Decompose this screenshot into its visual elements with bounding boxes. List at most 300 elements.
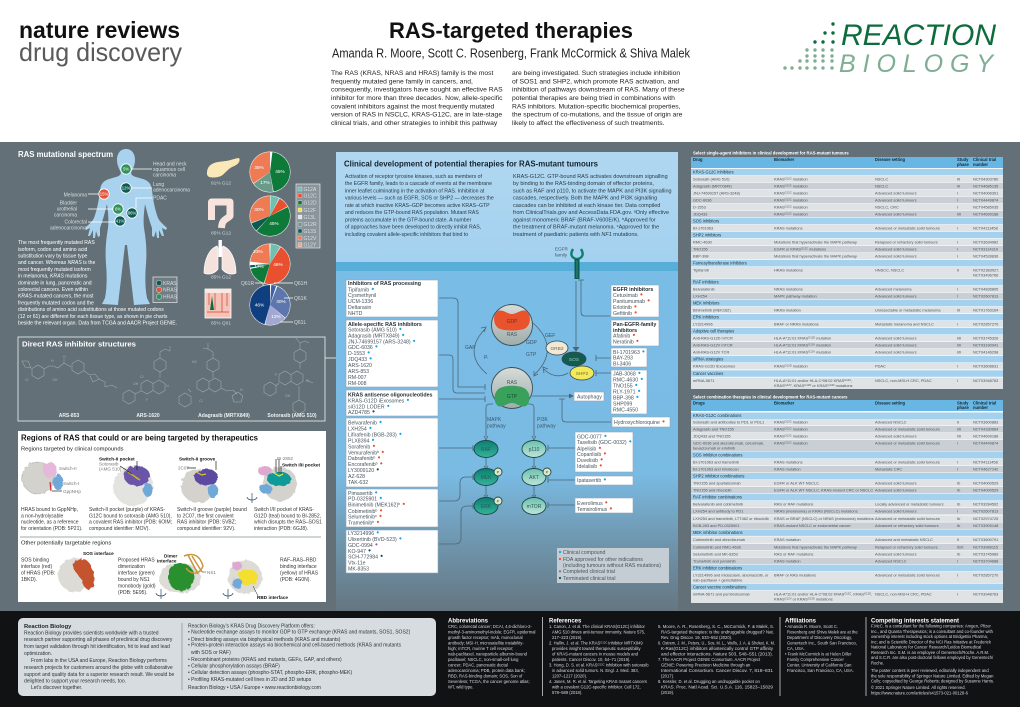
- heading: direct RAS inhibitor structures: Direct RAS inhibitor structures: [22, 340, 136, 348]
- box: hydroxychloroquine: Hydroxychloroquine •: [614, 417, 665, 426]
- box: AKT inhibitor: [575, 475, 633, 485]
- chemical structure: ARS-1620: [123, 346, 170, 419]
- exchange labels: GTP: [526, 352, 537, 358]
- text: pathway explanation: by binding to the RAS-binding domain of effector proteins,: [513, 181, 654, 187]
- table: select combination therapies: LY3214996 and midazolam, abemaciclib, or: [693, 572, 769, 577]
- footer: references: 217–223 (2019).: [552, 635, 582, 640]
- table: select combination therapies: I: [957, 591, 958, 596]
- pie chart: pancreas: 17%: [260, 180, 271, 186]
- table: select combination therapies: NCT03905148: [973, 523, 998, 528]
- text: pathway explanation: such as RAF and p110, to activate the MAPK and PI3K signalling: [513, 188, 672, 194]
- legend: KRAS mutations: G12F: [304, 208, 316, 214]
- structure: switch-II pocket with sotorasib: [99, 456, 153, 506]
- footer: references: 1207–1217 (2020).: [552, 674, 587, 679]
- table: select combination therapies: BRAF or RAS mutations: [774, 572, 816, 577]
- table header: Drugs: [693, 400, 706, 406]
- footer: competing interests statement: https://www.nature.com/articles/s41573-021-00128-6: [871, 690, 969, 695]
- introduction text: of SOS1 and SHP2, which promote RAS activation, and: [512, 78, 679, 85]
- box: EGFR inhibitors: [611, 285, 659, 317]
- table: select single-agent inhibitors: NCT03190941: [973, 343, 998, 348]
- body figure with tumour frequencies: Bladder: [60, 200, 77, 206]
- text: pathway explanation: the EGFR family, leads to a cascade of events at the membrane: [345, 181, 492, 187]
- table: select combination therapies: Trametinib and ponatinib: [693, 558, 736, 563]
- box: PI3K inhibitors: [575, 432, 633, 472]
- footer: affiliations: Rosenberg and Shiva Malek are at the: [787, 630, 858, 635]
- structure: switch-II pocket with sotorasib: Sotorasib: [99, 462, 119, 466]
- introduction text: version of RAS in NSCLC, KRAS-G12C, are in late-stage: [331, 112, 502, 119]
- structure: HRAS dimerization interface with NS1: bound by NS1: [118, 577, 150, 583]
- text: KRAS drug discovery platform offers: • Cellular phosphorylation assays (BRAF): [188, 664, 280, 670]
- body figure with tumour frequencies: 15%: [100, 192, 108, 197]
- footer: abbreviations: methyl-3-aminomethyl-indole; EGFR, epidermal: [448, 630, 536, 635]
- footer: references: (2017).: [661, 674, 674, 679]
- table: select combination therapies: Advanced solid tumours: [875, 509, 917, 514]
- text: pathway explanation: and reduces the GTP-bound RAS population. Mutant RAS: [345, 210, 479, 216]
- table: select single-agent inhibitors: BBP-398: [693, 254, 709, 259]
- kinase labels: p110: [529, 447, 540, 453]
- box: ERK inhibitors: [346, 528, 438, 573]
- structure: switch-II groove with 2C07: [178, 456, 218, 503]
- table header: number: [973, 405, 988, 410]
- box: RAF inhibitors: LXH254 •: [348, 424, 372, 432]
- box: allele-specific RAS inhibitors: JDQ433 •: [348, 354, 372, 363]
- text: mutational spectrum description: distributions of amino acid substitutions at those mutated codons: [18, 307, 164, 313]
- captions: clinical compound structures: G12D (teal) bound to BI-2852,: [254, 513, 321, 519]
- structure: SOS binding interface: of HRAS (PDB:: [21, 570, 55, 576]
- introduction text: [331, 70, 685, 127]
- subheading: clinical compounds: Regions targeted by clinical compounds: [21, 446, 124, 452]
- structure: switch I/II pocket with BI-2852: BI-2852: [277, 456, 294, 461]
- panel: regions of RAS targeted by therapeutics: [18, 431, 326, 602]
- introduction text: consequently, investigators have sought an effective RAS: [331, 87, 503, 94]
- table: select combination therapies: NCT03989115: [973, 544, 998, 549]
- text: pathway explanation: from ClinicalTrials.gov and AccessData.FDA.gov. ᵃOnly effective: [513, 210, 669, 216]
- box: SHP2 inhibitors: BBP-398 •: [613, 392, 639, 402]
- footer: competing interests statement: © 2021 Springer Nature Limited. All rights reserved.: [871, 685, 966, 690]
- box: PI3K inhibitors: Alpelisib •: [577, 444, 602, 452]
- box: SHP2 inhibitors: TNO155 •: [613, 380, 638, 390]
- body figure with tumour frequencies: Melanoma: [64, 192, 87, 198]
- table: select single-agent inhibitors: NSCLC, non-MSI-H CRC, PDAC: [875, 378, 932, 383]
- structure: switch I/II pocket with BI-2852: Switch I/II pocket: [282, 462, 320, 468]
- text: about Reaction Biology: research partner supporting all phases of preclinical drug discovery: [24, 637, 173, 643]
- legend: KRAS mutations: [296, 184, 320, 248]
- box: MEK inhibitors: Pimasertib •: [348, 488, 378, 497]
- chemical structure: Adagrasib: Cl: [199, 399, 203, 403]
- table: select single-agent inhibitors: NRAS mutation: [774, 307, 801, 312]
- table: select combination therapies: Advanced and metastatic NSCLC: [875, 537, 933, 542]
- table: select combination therapies: Adagrasib and TNO155: [693, 427, 734, 432]
- footer: affiliations: • Frank McCormick is at Helen Diller: [785, 652, 852, 657]
- box: ERK inhibitors: MK-8353: [348, 566, 369, 572]
- kinase labels: ERK: [481, 504, 492, 510]
- table: select single-agent inhibitors: RMC-4630: [693, 240, 713, 245]
- box: ERK inhibitors: Ulixertinib (BVD-523) •: [348, 534, 402, 543]
- text: pathway explanation: rate at which inactive KRAS–GDP becomes active KRAS–GTP: [345, 203, 490, 209]
- pie chart: lung: 17%: [254, 264, 265, 270]
- body figure with tumour frequencies: carcinoma: [153, 172, 176, 178]
- text: pathway explanation: proteins accumulate in the GTP-bound state. A number: [345, 217, 472, 223]
- table: select combination therapies: EGFR or ALK WT NSCLC, KRAS-mutant CRC or NSCLC: [774, 488, 873, 493]
- structure: RAF-RAS-RBD interface: [228, 558, 319, 600]
- text: pathway explanation: various levels — such as EGFR, SOS or SHP2 — decreases the: [345, 196, 494, 202]
- table: select single-agent inhibitors: LY3214996: [693, 322, 713, 327]
- table: select single-agent inhibitors: NCT04835805: [973, 286, 998, 291]
- text: pathway explanation: of approaches have been developed to directly inhibit RAS,: [345, 224, 481, 230]
- table: select single-agent inhibitors: KRASG12C mutation: [774, 197, 808, 202]
- footer: abbreviations: [448, 618, 536, 690]
- footer: references: and effector interactions. Nature 503, 548–551 (2013).: [661, 652, 773, 657]
- sponsor logo: Reaction Biology: BIOLOGY: [839, 50, 995, 78]
- table: select combination therapies: NCT03745989: [973, 551, 998, 556]
- RAS-GTP complex: RAS: [507, 380, 518, 386]
- table: select single-agent inhibitors: RAF inhibitors: [693, 279, 719, 284]
- chemical structure: Sotorasib: OH: [285, 394, 291, 398]
- kinase labels: [481, 447, 549, 510]
- box: MEK inhibitors: Trametinibᵇ •: [348, 518, 380, 526]
- box: allele-specific RAS inhibitors: ARS-1620: [348, 363, 372, 369]
- table: select single-agent inhibitors: I: [957, 322, 958, 327]
- box: mTOR inhibitors: [575, 498, 633, 513]
- table: select single-agent inhibitors: NCT03948763: [973, 378, 998, 383]
- text: about Reaction Biology: optimization.: [24, 651, 52, 657]
- exchange labels: GEF: [545, 333, 555, 339]
- footer: competing interests statement: F.McC. is a consultant for the following companies: Amgen, Pfizer: [871, 624, 992, 628]
- body figure with tumour frequencies: squamous cell: [153, 167, 185, 173]
- box: allele-specific RAS inhibitors: Adagrasib (MRTX849) •: [348, 330, 405, 340]
- table: select combination therapies: bevacizumab or erlotinib: [693, 446, 735, 451]
- legend: compound status: FDA approved for other indications: [563, 557, 643, 563]
- structure: switch-II pocket with sotorasib: (AMG 510): [99, 466, 122, 472]
- table: select single-agent inhibitors: Advanced solid tumours: [875, 211, 917, 216]
- chemical structure: ARS-1620: N: [166, 384, 169, 388]
- structure: HRAS dimerization interface with NS1: dimerization: [118, 564, 145, 570]
- table: select combination therapies: BI-1701963 and trametinib: [693, 460, 739, 465]
- structure: HRAS bound to GppNHp: Switch-I: [63, 481, 79, 486]
- pie chart: skin: Q61K: [294, 296, 307, 302]
- authors: Amanda R. Moore, Scott C. Rosenberg, Frank McCormick & Shiva Malek: [332, 46, 691, 60]
- text: mutational spectrum description: (12 or 61) are different for each tissue type, as shown in pie charts: [18, 314, 168, 320]
- exchange labels: GDP: [526, 340, 538, 346]
- table: select single-agent inhibitors: KRASG12C mutation: [774, 190, 808, 195]
- footer: references: with a covalent G12C-specific inhibitor. Cell 172,: [552, 685, 641, 690]
- table: select combination therapies: Advanced solid tumours: [875, 481, 917, 486]
- body figure with tumour frequencies: 12%: [122, 186, 130, 191]
- box: RAF inhibitors: Lifirafenib (BGB-283) •: [348, 430, 402, 438]
- body figure with tumour frequencies: urothelial: [57, 206, 77, 212]
- icon: EGFR family receptor: EGFR: [555, 246, 568, 252]
- table: select single-agent inhibitors: KRAS-G12C inhibitors: [693, 169, 734, 174]
- table: select combination therapies: RAS or RAF mutations: [774, 551, 813, 556]
- table: select single-agent inhibitors: NSCLC, CRC: [875, 204, 899, 209]
- table: select combination therapies: Cancer vaccine combinations: [693, 584, 746, 589]
- footer: references: KRAS. Proc. Natl Acad. Sci. U.S.A. 116, 15823–15829: [661, 685, 774, 690]
- box: MEK inhibitors: Binimetinib (MEK162)ᵇ •: [348, 500, 405, 508]
- table: select single-agent inhibitors: NCT03496766: [973, 273, 998, 278]
- captions: clinical compound structures: RAS inhibitor (PDB: 5VBZ;: [177, 520, 236, 526]
- captions: clinical compound structures: compound identifier: 92V).: [177, 526, 235, 532]
- captions: clinical compound structures: nucleotide, as a reference: [21, 520, 79, 526]
- table: select single-agent inhibitors: NCT03608631: [973, 364, 998, 369]
- table: select single-agent inhibitors: Advanced solid tumours: [875, 336, 917, 341]
- table header: Study: [957, 400, 969, 406]
- footer: references: 6. Ostrem, J. M., Peters, U., Sos, M. L., Wells, J. A. & Shokat, K. M.: [658, 641, 775, 646]
- table: select combination therapies: NCT03600883: [973, 420, 998, 425]
- table: select combination therapies: NCT04449874: [973, 441, 999, 446]
- table: select single-agent inhibitors: HLA-A*11:01 KRASG12V mutation: [774, 343, 831, 348]
- table: select combination therapies: KRAS mutation: [774, 537, 801, 542]
- text: about Reaction Biology: support and quality data for a superior research result. We would be: [24, 672, 174, 678]
- icon: skin section: [205, 289, 231, 326]
- table: select combination therapies: KRASG12V or KRASG13D mutations: [774, 596, 833, 601]
- footer: references: of KRAS-mutant cancers in mouse models and: [552, 652, 639, 657]
- table: select combination therapies: Belvarafenib and cobimetinib: [693, 502, 743, 507]
- footer: affiliations: [785, 618, 858, 673]
- box: pan-EGFR-family inhibitors: Neratinib •: [613, 336, 639, 346]
- structure: switch-II groove with 2C07: Switch-II groove: [179, 456, 216, 462]
- text: mutational spectrum description: in melanoma, KRAS mutations: [18, 274, 88, 280]
- kinase labels: P: [546, 470, 549, 475]
- introduction text: RAS inhibitors. Mutation-specific biochemical properties,: [512, 103, 681, 110]
- table: select single-agent inhibitors: NCT04699188: [973, 211, 998, 216]
- table: select combination therapies: NCT02974725: [973, 516, 998, 521]
- table: select single-agent inhibitors: Advanced solid tumours: [875, 247, 917, 252]
- table header: Disease setting: [875, 400, 906, 406]
- table: select combination therapies: Advanced NSCLC: [875, 420, 907, 425]
- structure: switch-II pocket with sotorasib: Switch-II pocket: [99, 456, 135, 462]
- structure: HRAS bound to GppNHp: [22, 462, 81, 494]
- box: RAF inhibitors: Vemurafenibᵇ •: [348, 448, 384, 456]
- sponsor logo: Reaction Biology: REACTION: [841, 19, 996, 52]
- box: allele-specific RAS inhibitors: RM-008: [348, 381, 367, 387]
- box: KRAS antisense oligonucleotides: KRAS-G12D iExosomes •: [348, 396, 409, 404]
- table: select single-agent inhibitors: Advanced solid tumours: [875, 350, 917, 355]
- RAS-GDP complex: RAS: [507, 332, 518, 338]
- box: allele-specific RAS inhibitors: D-1553 •: [348, 348, 370, 357]
- structure: SOS binding interface: interface (red): [21, 564, 52, 570]
- footer: abbreviations: high; mTCR, murine T cell receptor;: [448, 646, 513, 651]
- footer: abbreviations: adenocarcinoma; PDB, protein data bank;: [448, 668, 525, 673]
- box: PI3K inhibitors: GDC-0077 •: [577, 432, 607, 440]
- table: select combination therapies: NCT04111458: [973, 460, 998, 465]
- footer: references: Rev. Drug Discov. 19, 533–552 (2020).: [661, 635, 732, 640]
- introduction text: potential therapies are being tried in combinations with: [512, 95, 675, 102]
- box: RAF inhibitors: Dabrafenibᵇ •: [348, 453, 381, 462]
- captions: clinical compound structures: to 2C07, the first covalent: [177, 513, 234, 519]
- table: select single-agent inhibitors: I/II: [957, 336, 961, 341]
- footer: abbreviations: Abbreviations: [448, 618, 489, 624]
- table: select combination therapies: I/II: [957, 434, 961, 439]
- chemical structure: ARS-853: H: [51, 359, 54, 363]
- box: KRAS antisense oligonucleotides: AZD4785 •: [348, 407, 375, 416]
- table: select combination therapies: Advanced solid tumours: [875, 488, 917, 493]
- exchange labels: GAP: [465, 345, 476, 351]
- table: select single-agent inhibitors: I: [957, 240, 958, 245]
- text: pathway explanation: KRAS-G12C. GTP-bound RAS activates downstream signalling: [513, 174, 668, 180]
- table: select single-agent inhibitors: GDC-6036: [693, 197, 712, 202]
- table: select combination therapies: BI-1701963 and irinotecan: [693, 467, 739, 472]
- box: pan-EGFR-family inhibitors: Afatinib •: [613, 330, 636, 340]
- exchange labels: Pi: [484, 355, 488, 361]
- structure: HRAS dimerization interface with NS1: Dimer: [164, 554, 177, 558]
- box: allele-specific RAS inhibitors: JNJ-74699157 (ARS-3248) •: [348, 336, 416, 346]
- footer: affiliations: Genentech Inc., South San Francisco,: [787, 641, 857, 646]
- footer: competing interests statement: Competing interests statement: [871, 618, 959, 624]
- panel: Direct RAS inhibitor structures: [18, 337, 346, 421]
- RAS-GTP complex: GTP: [507, 394, 518, 400]
- box: SOS inhibitors: BI-3406: [613, 362, 631, 368]
- table: select single-agent inhibitors: Mutations that hyperactivate the MAPK pathway: [774, 254, 857, 259]
- body figure with tumour frequencies: 41%: [116, 219, 124, 224]
- chemical structure: ARS-853: O: [63, 355, 66, 359]
- introduction text: the spectrum of co-mutations, and the tissue of origin are: [512, 112, 683, 119]
- introduction text: frequently mutated gene family in cancers, and,: [331, 78, 473, 85]
- table: select single-agent inhibitors: HNSCC, NSCLC: [875, 268, 904, 273]
- box: SOS inhibitors: BAY-293: [613, 356, 633, 362]
- table: select combination therapies: EGFR or ALK WT NSCLC: [774, 481, 819, 486]
- legend: KRAS mutations: G13S: [304, 229, 317, 235]
- pie chart: skin: 46%: [255, 302, 265, 308]
- table: select single-agent inhibitors: D-1553: [693, 204, 706, 209]
- legend: KRAS mutations: G12A: [304, 187, 317, 193]
- structure: RAF-RAS-RBD interface: (yellow) of HRAS: [280, 570, 319, 576]
- panel: clinical development of potential therapies: [336, 152, 678, 611]
- table: select single-agent inhibitors: I/II: [957, 211, 961, 216]
- footer: affiliations: Francisco, San Francisco, CA, USA.: [787, 668, 854, 673]
- table: select combination therapies: KRAS-G12C combinations: [693, 413, 741, 418]
- chemical structure: Adagrasib: [179, 343, 250, 419]
- box: KRAS antisense oligonucleotides: [346, 390, 438, 416]
- footer: competing interests statement: National Laboratory for Cancer Research/Leidos Biomedical: [871, 644, 981, 650]
- table: select single-agent inhibitors: I: [957, 364, 958, 369]
- box: RAF inhibitors: Sorafenib •: [348, 442, 375, 450]
- text: about Reaction Biology: Reaction Biology: [24, 624, 72, 630]
- captions: clinical compound structures: [21, 507, 322, 532]
- table header: number: [973, 162, 988, 167]
- table: select single-agent inhibitors: Binimetinib (MEK162): [693, 307, 731, 312]
- box: pan-EGFR-family inhibitors: Pan-EGFR-family: [613, 322, 656, 328]
- structure: HRAS dimerization interface with NS1: NS1: [207, 570, 216, 575]
- footer: references: 578–589 (2018).: [552, 690, 582, 695]
- structure: HRAS dimerization interface with NS1: (PDB: 5E95).: [118, 590, 147, 596]
- table: select single-agent inhibitors: KRASG12D mutation: [774, 364, 808, 369]
- box: ERK inhibitors: Vtx-11e: [348, 560, 366, 566]
- icon: colon: 85% G12: [211, 230, 231, 236]
- text: mutational spectrum description: frequently mutated codon and the: [18, 300, 94, 306]
- table: select single-agent inhibitors: Anti-RAS-G12V mTCR: [693, 343, 733, 348]
- table: select single-agent inhibitors: NSCLC: [875, 176, 888, 181]
- box: EGFR inhibitors: EGFR inhibitors: [613, 287, 653, 293]
- table header: [691, 157, 1003, 168]
- box: mTOR inhibitors: Temsirolimus •: [577, 504, 612, 513]
- panel: Reaction Biology sponsor box: [18, 618, 436, 696]
- structure: switch-II groove with 2C07: 2C07: [178, 466, 189, 470]
- pie chart: skin: Q61L: [294, 320, 306, 326]
- text: mutational spectrum description: beside the relevant organ. Data from TCGA and AACR Project GENIE.: [18, 321, 177, 327]
- table: select combination therapies: NCT04000529: [973, 481, 998, 486]
- table: select combination therapies: I: [957, 460, 958, 465]
- chemical structure: ARS-1620: Cl: [140, 375, 144, 379]
- structure: HRAS dimerization interface with NS1: monobody (gold): [118, 584, 156, 590]
- box: MEK inhibitors: Selumetinibᶜ •: [348, 512, 382, 520]
- box: inhibitors of RAS processing: UCM-1336: [348, 299, 373, 305]
- footer: references: 3. Hong, D. S. et al. KRASG12C inhibition with sotorasib: [549, 663, 649, 668]
- table: select single-agent inhibitors: I/II: [957, 343, 961, 348]
- kinase labels: MEK: [481, 475, 492, 481]
- pie chart: colon: 30%: [254, 207, 265, 213]
- table: select combination therapies: SOS inhibitor combinations: [693, 453, 742, 458]
- icon: colon: [211, 202, 231, 236]
- table: select combination therapies: Ib: [957, 502, 960, 507]
- text: pathway explanation: treatment of paediatric patients with NF1 mutations.: [513, 232, 639, 238]
- table: select combination therapies: Advanced or metastatic solid tumours: [875, 441, 940, 446]
- legend: RAS isoforms: HRAS: [163, 294, 178, 300]
- text: pathway explanation: against monomeric BRAF (BRAF-V600E/K). ᵇApproved for: [513, 216, 656, 223]
- structure: SOS binding interface: 1BKD).: [21, 577, 37, 583]
- table: select combination therapies: RAS or RAF mutations: [774, 502, 813, 507]
- table: select combination therapies: Advanced or metastatic solid tumours: [875, 516, 940, 521]
- structure: HRAS bound to GppNHp: GppNHp: [63, 489, 81, 494]
- box: pan-EGFR-family inhibitors: [611, 320, 659, 346]
- introduction text: The RAS (KRAS, NRAS and HRAS) family is the most: [331, 70, 494, 77]
- box: SHP2 inhibitors: RMC-4630 •: [613, 374, 643, 384]
- body figure with tumour frequencies: Lung: [153, 182, 164, 188]
- captions: clinical compound structures: which disrupts the RAS–SOS1: [254, 520, 322, 526]
- table: select single-agent inhibitors: Advanced melanoma: [875, 286, 912, 291]
- table: select single-agent inhibitors: Anti-RAS-G12D mTCR: [693, 336, 733, 341]
- structure: SOS binding interface: SOS binding: [21, 558, 49, 564]
- text: mutational spectrum description: and cancer. Whereas NRAS is the: [18, 260, 95, 266]
- legend: KRAS mutations: G13L: [304, 215, 316, 221]
- table: select single-agent inhibitors: Cancer vaccines: [693, 371, 723, 376]
- legend: RAS isoforms: KRAS: [163, 281, 177, 287]
- structure: switch I/II pocket with BI-2852: [258, 456, 320, 501]
- table: select single-agent inhibitors: KRASG12C mutation: [774, 183, 808, 188]
- box: MEK inhibitors: [346, 488, 438, 527]
- structure: RAF-RAS-RBD interface: RBD interface: [257, 595, 288, 600]
- table: select combination therapies: KRASG12C mutation: [774, 420, 808, 425]
- pie chart: skin: 13%: [271, 314, 282, 320]
- structure: HRAS dimerization interface with NS1: interface (green): [118, 570, 155, 576]
- table: select combination therapies: nab-paclitaxel + gemcitabine: [693, 577, 742, 582]
- table: select single-agent inhibitors: Anti-RAS-G12V TCR: [693, 350, 729, 355]
- legend: compound status: Clinical compound: [563, 550, 606, 556]
- table: select combination therapies: ERK inhibitor combinations: [693, 565, 742, 570]
- box: EGFR inhibitors: Panitumumab •: [613, 296, 650, 305]
- footer: abbreviations: CRC, colorectal cancer; DCAI, 4,6-dichloro-2-: [448, 624, 532, 629]
- box: SHP2 inhibitors: RLY-1971 •: [613, 386, 641, 396]
- table: select single-agent inhibitors: NCT04146298: [973, 350, 998, 355]
- kinase labels: P: [497, 499, 500, 504]
- introduction text: covalent inhibitors against the most frequently mutated: [331, 103, 494, 110]
- footer: references: 8. Kessler, D. et al. Drugging an undruggable pocket on: [658, 679, 760, 684]
- footer: competing interests statement: and S.C.R. are also post-doctoral fellows employed by Genentech/: [871, 655, 994, 660]
- table: select combination therapies: NCT02607813: [973, 509, 998, 514]
- footer: competing interests statement: Roche.: [871, 660, 884, 665]
- legend: RAS isoforms: [153, 277, 178, 302]
- table: select single-agent inhibitors: III: [957, 176, 960, 181]
- table: select combination therapies: LXH254 and trametinib, LTT462 or ribociclib: [693, 516, 769, 521]
- footer: references: 2. Hallin, J. et al. The KRASG12C inhibitor MRTX849: [549, 641, 643, 646]
- box: allele-specific RAS inhibitors: Allele-specific RAS inhibitors: [348, 322, 422, 328]
- text: KRAS drug discovery platform offers: • Direct binding assays via biophysical methods (KRAS and mutants): [188, 637, 341, 643]
- box: RAF inhibitors: LY3009120 •: [348, 465, 379, 474]
- table header: Drug: [693, 157, 703, 162]
- table: select single-agent inhibitors: Advanced solid tumours: [875, 343, 917, 348]
- kinase labels: RAF: [481, 447, 491, 453]
- captions: clinical compound structures: interaction (PDB: 6GJ8).: [254, 526, 308, 532]
- footer: references: 1. Canon, J. et al. The clinical KRAS(G12C) inhibitor: [549, 624, 646, 629]
